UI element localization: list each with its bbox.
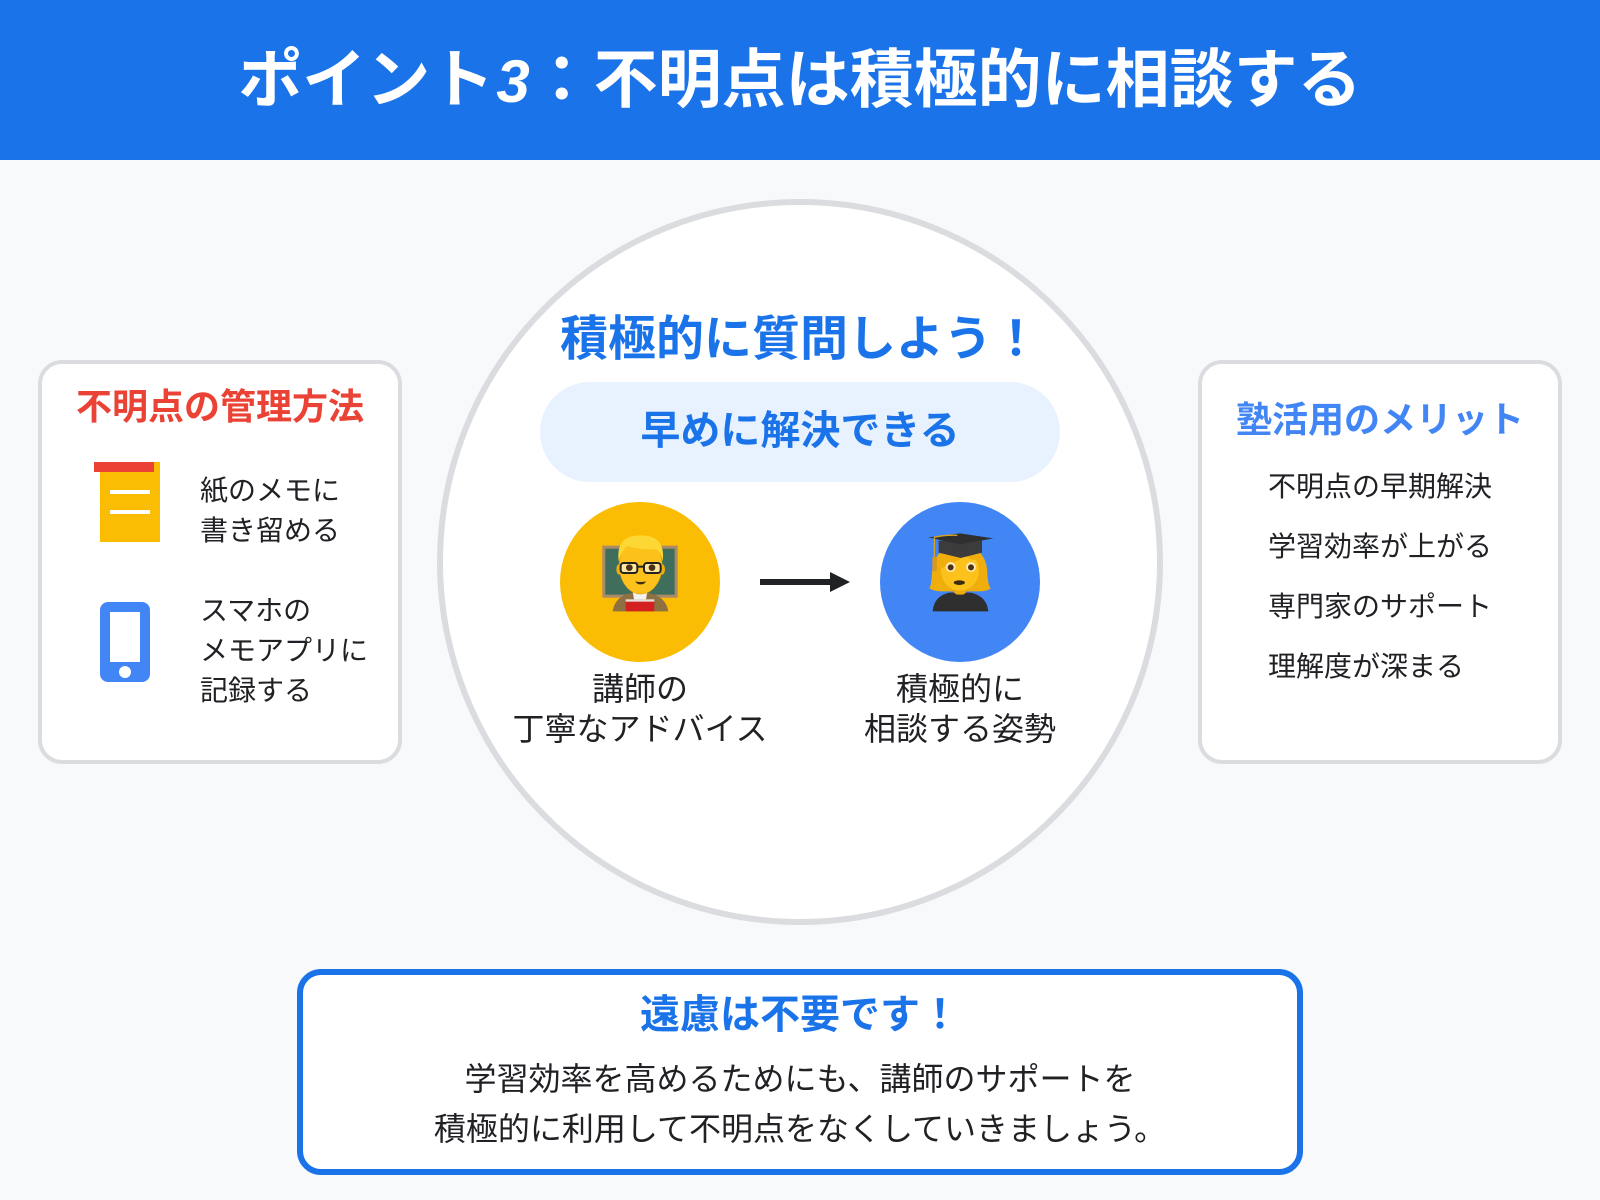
icon: paper memo: [94, 462, 160, 542]
panel heading: 塾活用のメリット: [1236, 399, 1524, 440]
text: paper memo: 書き留める: [200, 515, 340, 546]
text: smartphone memo: メモアプリに: [200, 635, 368, 666]
arrow: teacher to student: [760, 572, 850, 592]
pill text: 早めに解決できる: [640, 409, 960, 453]
merit list: [1268, 471, 1492, 682]
panel: cram school merits: [1198, 360, 1562, 764]
header banner: [0, 0, 1600, 160]
icon: student emoji on blue circle: [880, 502, 1040, 662]
title: ポイント3：不明点は積極的に相談する: [238, 44, 1362, 116]
label: teacher: [512, 671, 768, 747]
icon: smartphone: [100, 602, 150, 682]
text: paper memo: [200, 475, 340, 546]
label: student: 積極的に: [896, 671, 1024, 707]
panel: managing unknowns: [38, 360, 402, 764]
closing body: 学習効率を高めるためにも、講師のサポートを: [464, 1061, 1136, 1097]
panel heading: 不明点の管理方法: [76, 386, 364, 427]
label: student: 相談する姿勢: [864, 711, 1056, 747]
closing body: [434, 1061, 1166, 1147]
panel: central circle: [437, 199, 1163, 925]
closing body: 積極的に利用して不明点をなくしていきましょう。: [434, 1111, 1166, 1147]
pill: benefit: [540, 382, 1060, 482]
text: smartphone memo: 記録する: [200, 675, 312, 706]
panel: closing message: [297, 969, 1303, 1175]
label: student: [864, 671, 1056, 747]
merit list: 学習効率が上がる: [1268, 531, 1492, 562]
text: smartphone memo: スマホの: [200, 595, 311, 626]
text: paper memo: 紙のメモに: [200, 475, 340, 506]
label: teacher: 講師の: [592, 671, 688, 707]
text: smartphone memo: [200, 595, 368, 706]
merit list: 専門家のサポート: [1268, 591, 1492, 622]
closing heading: 遠慮は不要です！: [640, 993, 960, 1037]
label: teacher: 丁寧なアドバイス: [512, 711, 768, 747]
merit list: 不明点の早期解決: [1268, 471, 1492, 502]
merit list: 理解度が深まる: [1268, 651, 1464, 682]
central heading: 積極的に質問しよう！: [560, 313, 1040, 366]
icon: teacher emoji on yellow circle: [560, 502, 720, 662]
